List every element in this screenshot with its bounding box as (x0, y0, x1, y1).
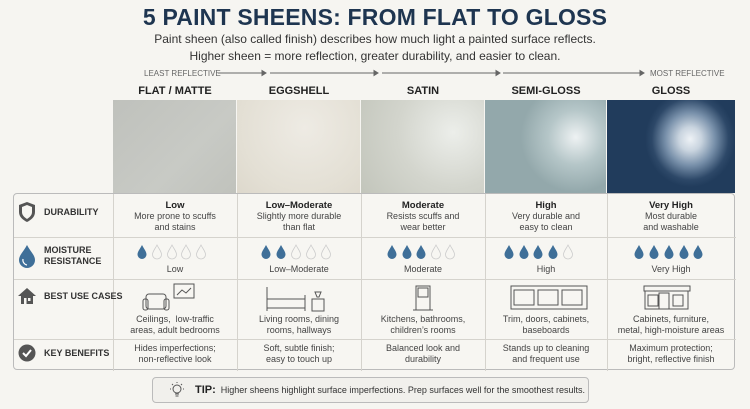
door (413, 286, 433, 310)
text: Kitchens, bathrooms, (381, 314, 465, 324)
text: bright, reflective finish (627, 354, 715, 364)
reflectivity arrow (144, 69, 725, 78)
row label: best use cases: BEST USE CASES (44, 291, 123, 301)
text: EGGSHELL (269, 85, 329, 97)
text: children’s rooms (390, 325, 456, 335)
key benefits cells: non-reflective look (138, 354, 212, 364)
row label: durability: DURABILITY (44, 207, 98, 217)
text: Living rooms, dining (259, 314, 339, 324)
column headings: FLAT / MATTE (138, 85, 212, 97)
row label: key benefits (18, 344, 109, 362)
swatch: gloss (607, 100, 735, 193)
reflectivity arrow: LEAST REFLECTIVE (144, 69, 221, 78)
text: Soft, subtle finish; (263, 343, 335, 353)
row label: best use cases (18, 288, 123, 304)
text: Low–Moderate (266, 200, 332, 211)
text: Slightly more durable (257, 211, 341, 221)
tip callout (152, 377, 589, 403)
text: Low (167, 264, 183, 274)
durability cells: Low (166, 200, 184, 211)
table (13, 193, 735, 370)
text: Very High (649, 200, 693, 211)
text: rooms, hallways (267, 325, 331, 335)
sofa & frame (143, 284, 194, 310)
furniture (644, 286, 690, 309)
subtitle: Paint sheen (also called finish) describes how much light a painted surface reflects. (154, 32, 596, 46)
text: and frequent use (512, 354, 580, 364)
reflectivity arrow: MOST REFLECTIVE (650, 69, 725, 78)
text: Low–Moderate (269, 264, 329, 274)
moisture drops (138, 244, 702, 260)
text: Stands up to cleaning (503, 343, 589, 353)
text: and washable (643, 222, 699, 232)
tip callout: TIP: Higher sheens highlight surface imperfections. Prep surfaces well for the smoothest results. (195, 384, 585, 396)
swatch: semi-gloss (485, 100, 606, 193)
text: areas, adult bedrooms (130, 325, 220, 335)
text: GLOSS (652, 85, 690, 97)
subtitle (154, 32, 596, 63)
text: Moderate (404, 264, 442, 274)
text: Very High (651, 264, 691, 274)
text: wear better (400, 222, 446, 232)
key benefits cells (134, 343, 216, 364)
text: High (535, 200, 557, 211)
row label: moisture (19, 245, 102, 268)
text: Moderate (402, 200, 444, 211)
subtitle: Higher sheen = more reflection, greater durability, and easier to clean. (190, 49, 560, 63)
swatch: satin (361, 100, 484, 193)
text: SEMI-GLOSS (511, 85, 581, 97)
text: easy to touch up (266, 354, 332, 364)
text: Maximum protection; (629, 343, 713, 353)
text: Cabinets, furniture, (633, 314, 709, 324)
text: durability (405, 354, 441, 364)
text: than flat (283, 222, 315, 232)
bed & lamp (267, 287, 324, 311)
text: metal, high-moisture areas (618, 325, 724, 335)
durability cells (134, 200, 216, 232)
text: Ceilings, low-traffic (136, 314, 214, 324)
title: 5 PAINT SHEENS: FROM FLAT TO GLOSS (143, 4, 607, 30)
row label: durability (19, 202, 98, 222)
text: Resists scuffs and (387, 211, 459, 221)
text: SATIN (407, 85, 439, 97)
key benefits cells: Hides imperfections; (134, 343, 216, 353)
use case icons (142, 284, 690, 312)
row label: key benefits: KEY BENEFITS (44, 348, 109, 358)
text: Balanced look and (386, 343, 460, 353)
text: Very durable and (512, 211, 580, 221)
text: baseboards (522, 325, 570, 335)
cabinets (511, 286, 587, 309)
text: easy to clean (519, 222, 573, 232)
text: Trim, doors, cabinets, (503, 314, 589, 324)
swatch: eggshell (237, 100, 360, 193)
row label: moisture: MOISTURE (44, 245, 92, 255)
durability cells: More prone to scuffs (134, 211, 216, 221)
row label: moisture: RESISTANCE (44, 256, 101, 266)
text: Most durable (645, 211, 697, 221)
icon: lightbulb (170, 382, 184, 396)
durability cells: and stains (154, 222, 196, 232)
swatch: flat (113, 100, 236, 193)
text: High (537, 264, 555, 274)
